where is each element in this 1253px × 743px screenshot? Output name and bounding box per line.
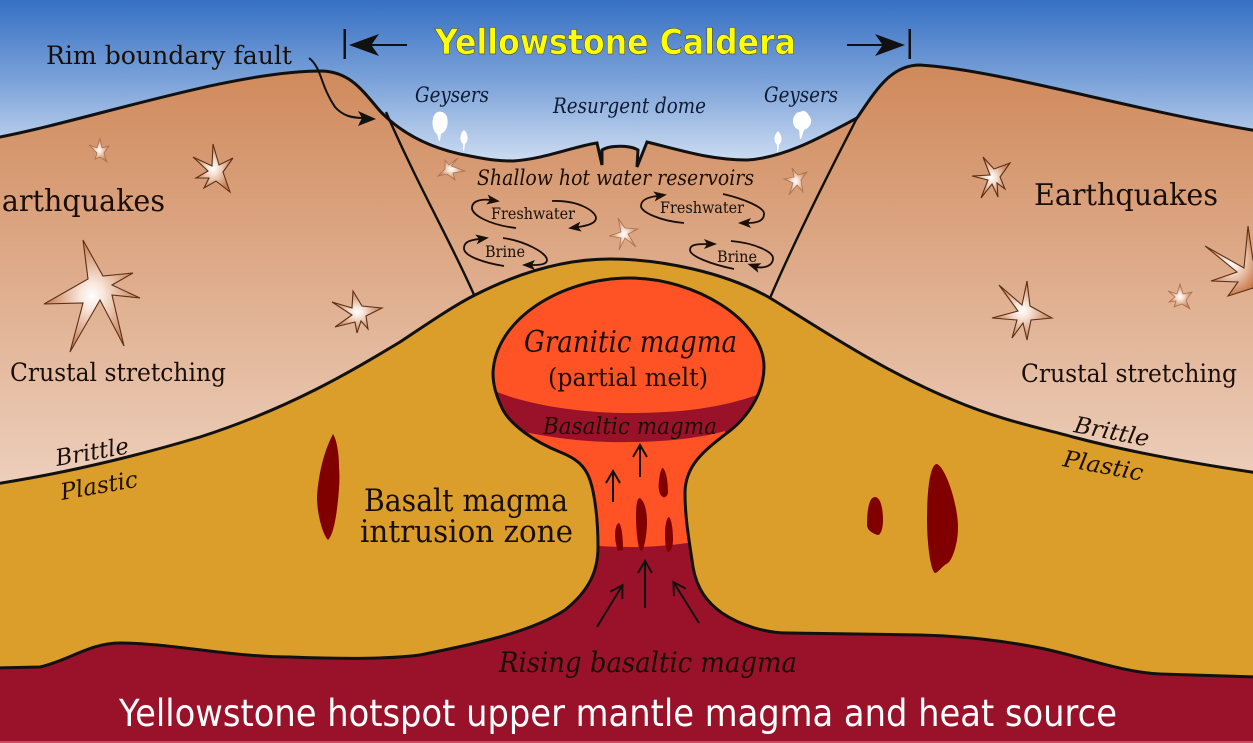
rim fault pointer arrow bbox=[309, 58, 376, 126]
bottom edge strip bbox=[0, 741, 1253, 743]
label: brine left: Brine bbox=[485, 243, 525, 261]
label: freshwater right: Freshwater bbox=[660, 199, 745, 217]
label: basalt magma intrusion zone bbox=[360, 484, 573, 550]
star: small upper left bbox=[89, 138, 109, 162]
sky background bbox=[0, 0, 1253, 170]
label: granitic magma: Granitic magma bbox=[524, 325, 737, 360]
title: Yellowstone Caldera bbox=[434, 23, 796, 63]
star: large left bbox=[44, 240, 140, 352]
label: rim boundary fault: Rim boundary fault bbox=[46, 41, 293, 71]
star: cut-off far right bbox=[1205, 226, 1253, 296]
caldera fault lines bbox=[386, 112, 857, 298]
intrusion blobs bbox=[317, 434, 958, 573]
label: earthquakes right: Earthquakes bbox=[1034, 178, 1218, 213]
star: caldera left bbox=[438, 158, 465, 180]
earthquake stars bbox=[44, 138, 1253, 352]
label: brine right: Brine bbox=[717, 248, 757, 266]
star: upper left bbox=[193, 144, 233, 192]
label: brittle right: Brittle bbox=[1071, 412, 1151, 452]
label: shallow hot water reservoirs: Shallow hot water reservoirs bbox=[477, 166, 754, 190]
label: resurgent dome: Resurgent dome bbox=[552, 94, 706, 118]
label: hotspot heat source: Yellowstone hotspot upper mantle magma and heat source bbox=[118, 692, 1117, 735]
label: geysers right: Geysers bbox=[764, 83, 838, 107]
label: geysers left: Geysers bbox=[415, 83, 489, 107]
label: basaltic magma: Basaltic magma bbox=[542, 412, 717, 440]
magma rise arrows bbox=[597, 446, 699, 627]
label: rising basaltic magma: Rising basaltic magma bbox=[498, 646, 797, 679]
label: plastic left: Plastic bbox=[58, 467, 140, 506]
label: crustal stretching left: Crustal stretching bbox=[10, 358, 226, 388]
caldera width arrow left bbox=[344, 29, 407, 59]
label: plastic right: Plastic bbox=[1060, 446, 1145, 487]
circulation arrows bbox=[464, 194, 773, 269]
rock crust with caldera surface bbox=[0, 65, 1253, 500]
label: partial melt: (partial melt) bbox=[548, 363, 708, 393]
magma chamber, conduit and mantle bbox=[0, 270, 1253, 743]
star: lower right bbox=[992, 281, 1052, 340]
star: upper right bbox=[972, 157, 1010, 198]
star: mid left bbox=[332, 291, 382, 333]
star: caldera centre bbox=[609, 218, 638, 250]
label: basalt magma intrusion zone: intrusion zone bbox=[360, 515, 573, 550]
geysers bbox=[433, 111, 811, 152]
plastic basalt intrusion layer bbox=[0, 259, 1253, 743]
label: freshwater left: Freshwater bbox=[491, 205, 576, 223]
star: small right bbox=[1168, 284, 1192, 309]
label: brittle left: Brittle bbox=[53, 433, 131, 472]
label: crustal stretching right: Crustal stretching bbox=[1021, 359, 1237, 389]
caldera width arrow right bbox=[847, 29, 911, 59]
label: basalt magma intrusion zone: Basalt magma bbox=[364, 484, 568, 519]
star: caldera right bbox=[784, 168, 807, 195]
